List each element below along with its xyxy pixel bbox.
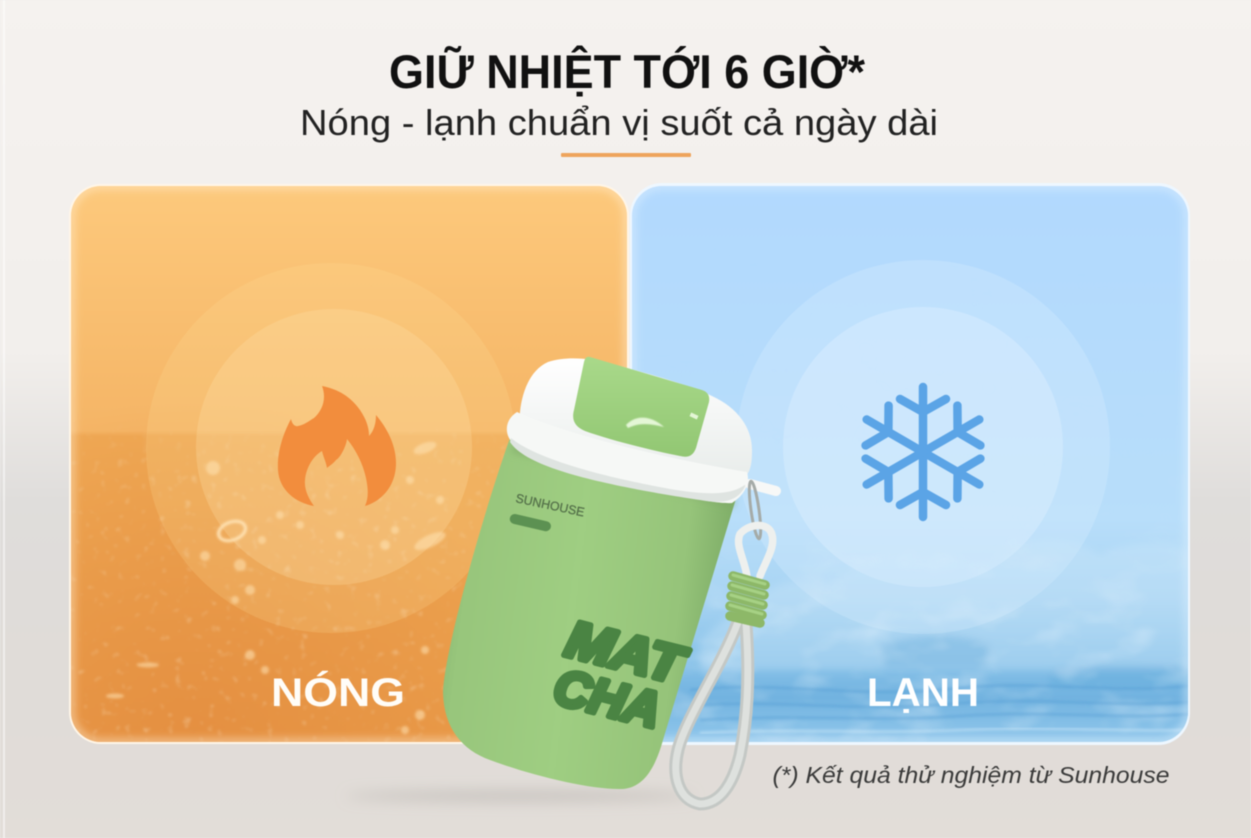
strap [676,481,776,804]
label: cold: LẠNH [867,671,979,715]
bottle lid [520,358,752,476]
bottle MATCHA print [548,610,693,739]
bottle brand: SUNHOUSE [514,491,586,519]
subtitle: Nóng - lạnh chuẩn vị suốt cả ngày dài [300,102,938,143]
panel inner glow [71,186,627,742]
strap green knot [730,576,765,623]
bubbles [106,439,448,734]
icon: snowflake [855,387,991,517]
bottle flip tab [573,357,709,457]
label: hot: NÓNG [271,669,405,715]
bottle MATCHA print: MAT [560,610,693,696]
bottle brand [509,491,586,532]
bubble texture [72,444,504,741]
icon: flame [278,386,396,506]
bottle MATCHA print: CHA [548,658,667,739]
title: GIỮ NHIỆT TỚI 6 GIỜ* [389,45,866,98]
water texture [672,589,1187,741]
concentric glow circles [736,260,1110,634]
concentric glow circles [146,308,512,633]
strap cord [676,622,748,804]
panel: cold [630,183,1190,745]
water ripples [690,685,1190,720]
strap upper loop [739,525,773,576]
orange divider [561,153,691,157]
panel inner glow [632,186,1188,742]
bottle body [443,438,738,789]
bottle shadow [345,791,695,801]
panel: hot [69,184,629,744]
water splash [700,541,1190,688]
bottle [443,357,752,789]
footnote: (*) Kết quả thử nghiệm từ Sunhouse [772,762,1170,788]
strap hook [750,484,776,491]
